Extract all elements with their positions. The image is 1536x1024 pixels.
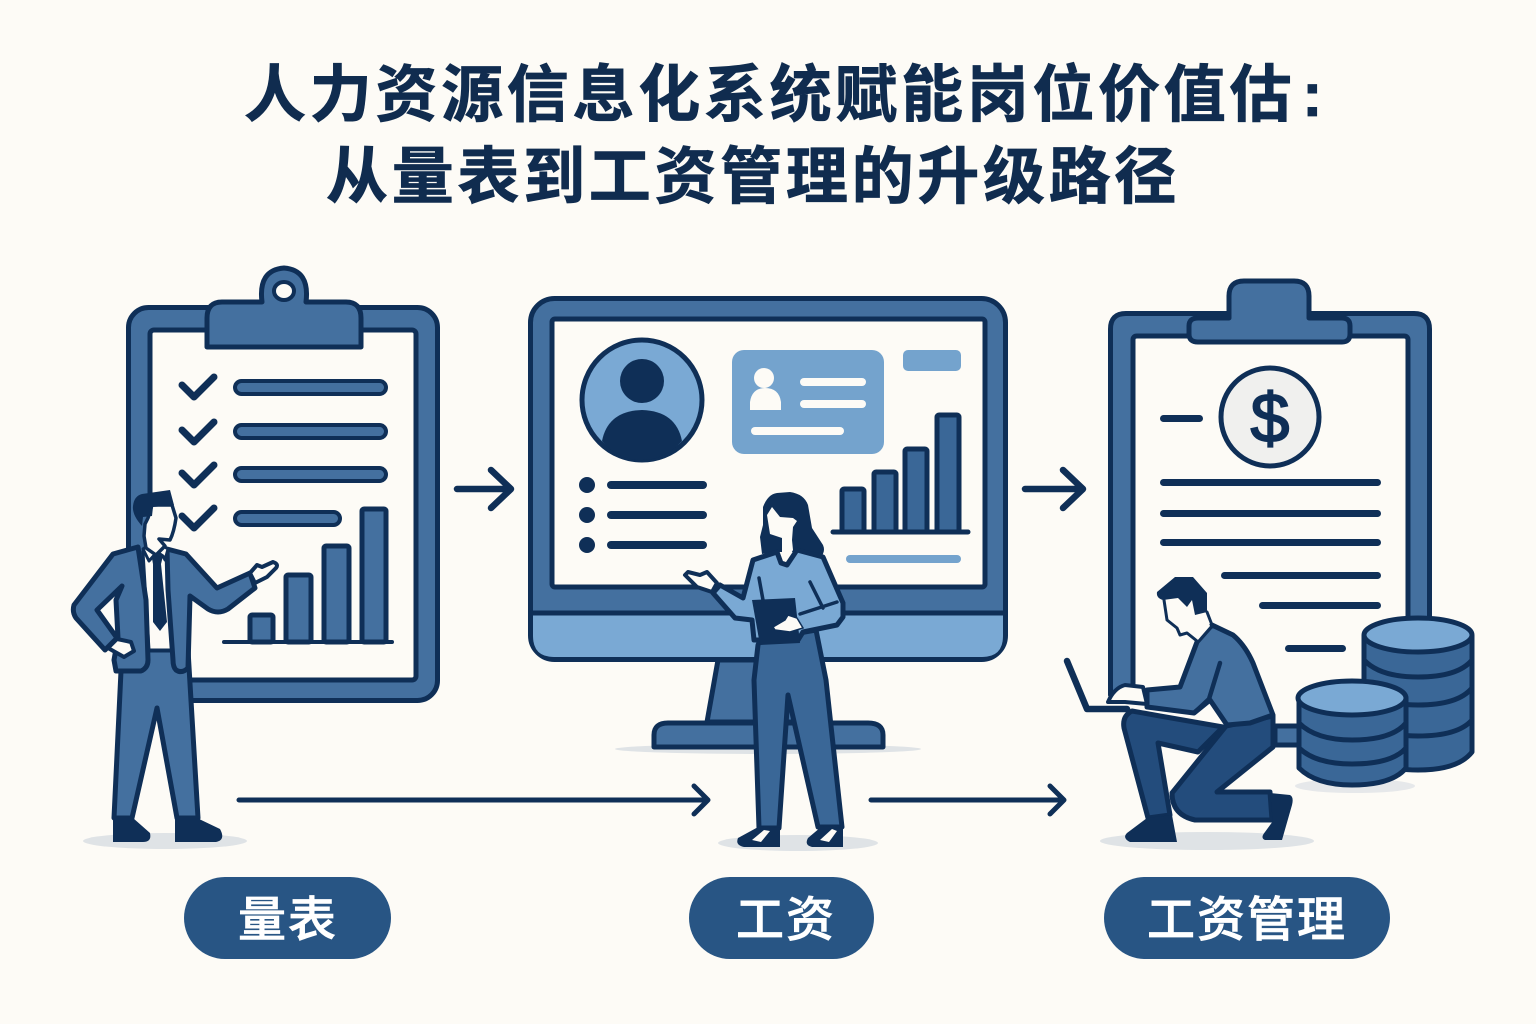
hair	[133, 490, 174, 526]
dollar icon: $	[1251, 379, 1289, 457]
avatar	[582, 340, 702, 460]
monitor body	[530, 298, 1006, 660]
trousers: back leg	[1124, 711, 1223, 818]
collar	[143, 544, 168, 561]
large stack	[1364, 618, 1472, 770]
title: 人力资源信息化系统赋能岗位价值估	[244, 61, 1295, 130]
trousers	[754, 630, 842, 828]
pill: 工资管理: 工资管理	[1147, 894, 1347, 947]
panel: salary clipboard	[1110, 281, 1430, 745]
shadow	[83, 833, 247, 849]
arrow: scale to salary	[457, 470, 511, 508]
dollar icon	[1221, 368, 1319, 466]
light line	[846, 555, 961, 563]
clipboard paper	[150, 330, 416, 680]
neck and face	[144, 505, 176, 555]
arrow: long bottom	[239, 786, 708, 814]
hand on tablet	[773, 615, 803, 632]
jacket: left side and arm	[73, 547, 148, 671]
clipboard board	[128, 308, 438, 700]
bar chart	[224, 509, 392, 642]
pill: 工资	[689, 877, 874, 959]
clipboard clip	[207, 268, 361, 347]
monitor stand	[707, 660, 825, 722]
small tag	[903, 350, 961, 371]
blouse	[713, 550, 843, 640]
document lines	[1160, 415, 1381, 652]
shoes	[1125, 793, 1293, 842]
shadow	[718, 835, 878, 851]
screen	[552, 319, 985, 587]
face	[1163, 595, 1210, 641]
shoes	[113, 818, 222, 842]
trousers	[114, 650, 198, 818]
panel: scale clipboard	[128, 268, 438, 700]
monitor chin	[533, 615, 1003, 657]
arrow: salary to management	[1025, 470, 1083, 508]
hair	[1157, 577, 1207, 615]
face and neck	[767, 507, 797, 562]
pill: 量表	[184, 877, 391, 959]
clip	[1189, 281, 1350, 342]
shadow	[1100, 832, 1314, 850]
tablet	[752, 598, 800, 645]
figure: kneeling man with laptop	[1067, 577, 1314, 850]
hands	[108, 562, 277, 657]
checklist	[182, 377, 386, 528]
coin stacks	[1295, 618, 1472, 793]
sleeve and pocket details	[759, 578, 837, 614]
title	[244, 61, 1326, 212]
profile card	[732, 350, 884, 454]
pill: 量表: 量表	[238, 894, 338, 947]
pill: 工资管理	[1104, 877, 1390, 959]
tie	[151, 553, 167, 631]
hair	[760, 492, 824, 558]
clipboard paper	[1133, 336, 1408, 725]
shirt	[143, 552, 172, 650]
torso and arm	[1147, 625, 1273, 725]
bullet list	[579, 477, 707, 553]
figure: man in suit	[73, 490, 277, 849]
raised hand	[685, 572, 717, 592]
title: 从量表到工资管理的升级路径	[326, 143, 1180, 212]
panel: monitor	[530, 298, 1006, 754]
small stack	[1298, 681, 1406, 785]
shoes	[737, 826, 780, 847]
trousers: front leg	[1172, 716, 1273, 820]
soft shadow	[1295, 779, 1415, 793]
figure: woman with tablet	[685, 492, 878, 851]
stand shadow	[615, 744, 921, 754]
laptop	[1067, 661, 1127, 709]
hand	[1108, 685, 1147, 704]
clipboard board	[1110, 314, 1430, 745]
jacket: right side and arm	[167, 549, 255, 672]
monitor bar chart	[833, 415, 968, 532]
arrow: short bottom	[871, 786, 1064, 814]
clip hole	[274, 282, 294, 300]
title: :	[1302, 61, 1326, 130]
pill: 工资: 工资	[736, 894, 836, 947]
monitor base	[654, 723, 883, 747]
